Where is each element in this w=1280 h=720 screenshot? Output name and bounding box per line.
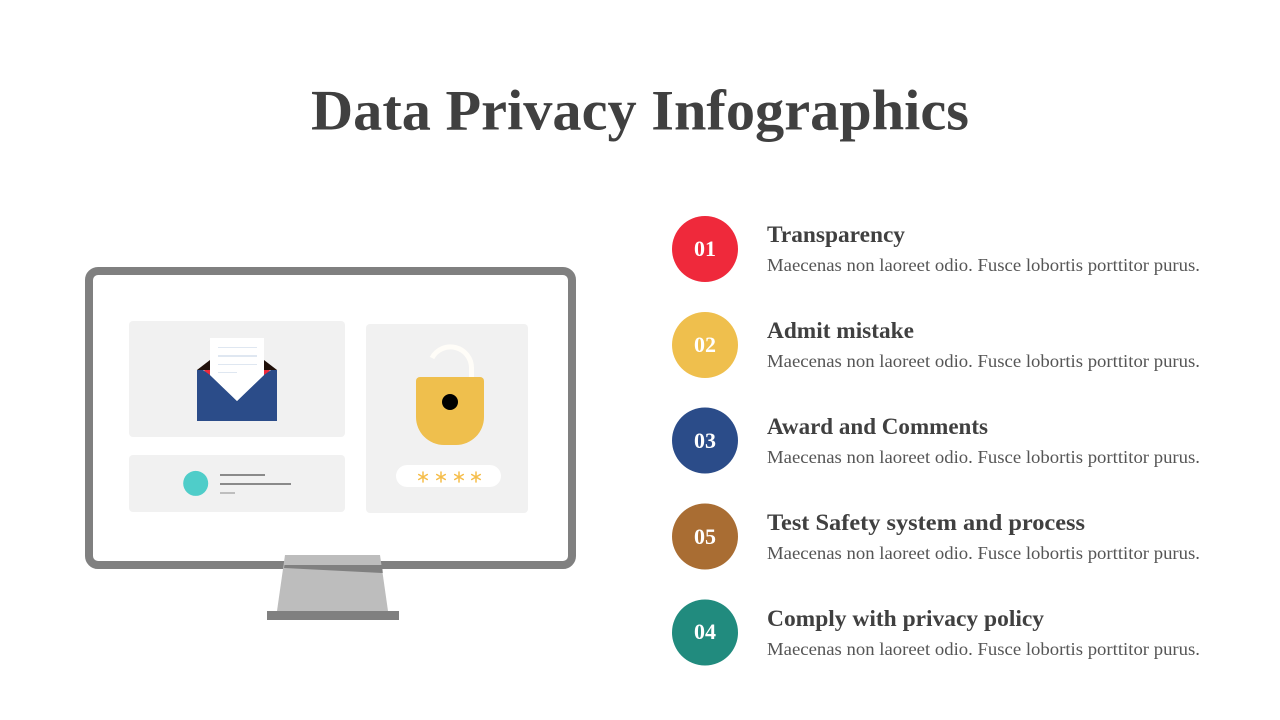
profile text lines <box>220 474 291 494</box>
monitor screen frame <box>89 271 572 565</box>
list item 05 <box>672 504 1200 570</box>
description: Maecenas non laoreet odio. Fusce lobortis porttitor purus. <box>767 447 1200 467</box>
heading: Comply with privacy policy: Comply with privacy policy <box>767 606 1045 631</box>
description: Maecenas non laoreet odio. Fusce lobortis porttitor purus. <box>767 543 1200 563</box>
number badge 02: 02 <box>694 332 716 357</box>
number badge 02 <box>672 312 738 378</box>
description: Maecenas non laoreet odio. Fusce lobortis porttitor purus. <box>767 255 1200 275</box>
heading: Award and Comments: Award and Comments <box>767 414 988 439</box>
icon: teal avatar dot <box>183 471 208 496</box>
number badge 05: 05 <box>694 524 716 549</box>
number badge 03: 03 <box>694 428 716 453</box>
panel: profile card <box>129 455 345 512</box>
monitor stand base <box>267 611 399 620</box>
icon: open padlock <box>416 347 484 445</box>
password field <box>396 465 501 487</box>
panel: email card <box>129 321 345 437</box>
number badge 01 <box>672 216 738 282</box>
number badge 04: 04 <box>694 619 716 644</box>
number badge 01: 01 <box>694 236 716 261</box>
monitor stand neck <box>277 555 388 611</box>
title: Data Privacy Infographics <box>311 80 969 142</box>
description: Maecenas non laoreet odio. Fusce lobortis porttitor purus. <box>767 639 1200 659</box>
list item 03 <box>672 408 1200 474</box>
heading: Transparency: Transparency <box>767 222 905 247</box>
description: Maecenas non laoreet odio. Fusce lobortis porttitor purus. <box>767 351 1200 371</box>
number badge 03 <box>672 408 738 474</box>
number badge 04 <box>672 600 738 666</box>
list item 02 <box>672 312 1200 378</box>
list item 01 <box>672 216 1200 282</box>
illustration: computer monitor <box>89 271 572 620</box>
heading: Admit mistake: Admit mistake <box>767 318 914 343</box>
icon: open envelope with letter <box>197 338 277 421</box>
panel: password card <box>366 324 528 513</box>
number badge 05 <box>672 504 738 570</box>
list item 04 <box>672 600 1200 666</box>
heading: Test Safety system and process: Test Safety system and process <box>767 510 1085 535</box>
